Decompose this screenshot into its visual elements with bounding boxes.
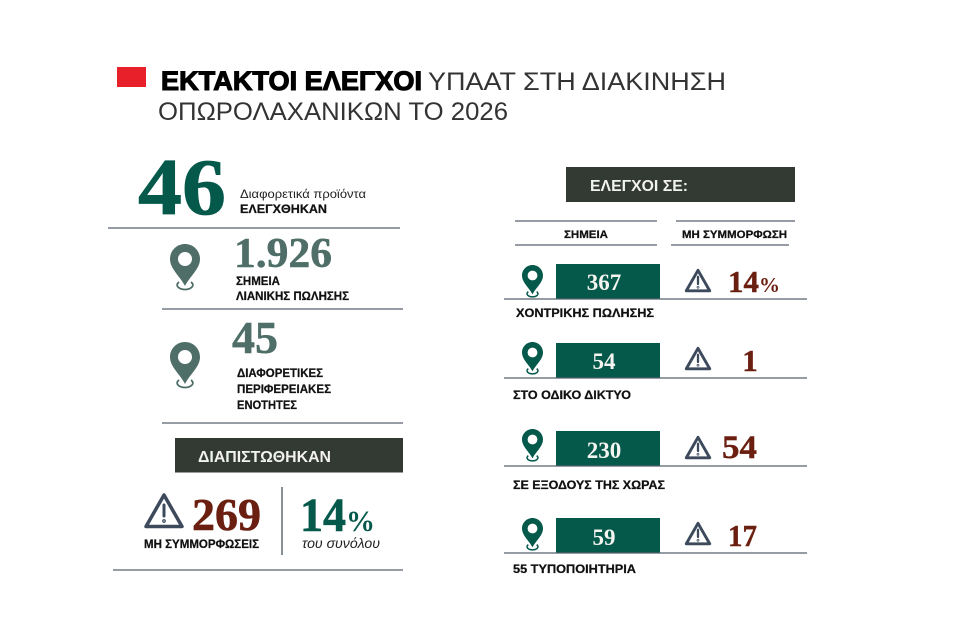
stat: 1.926 retail points: 1.926	[234, 231, 332, 277]
heading: found	[175, 438, 403, 472]
icon: warning triangle	[686, 348, 710, 369]
row: packing plants: 59	[592, 525, 616, 550]
row: country exits: 54	[722, 430, 757, 466]
title line 1	[161, 66, 726, 96]
title line 1: ΥΠΑΑΤ ΣΤΗ ΔΙΑΚΙΝΗΣΗ	[428, 68, 726, 96]
stat: 45 regional units	[170, 313, 331, 412]
row: wholesale: 367	[587, 270, 621, 295]
row: country exits	[504, 429, 807, 492]
stat: 46 products	[138, 142, 366, 232]
row: country exits: 230	[587, 438, 621, 463]
row: country exits: ΣΕ ΕΞΟΔΟΥΣ ΤΗΣ ΧΩΡΑΣ	[513, 478, 665, 492]
stat: 14 percent of total	[300, 489, 380, 551]
heading: found: ΔΙΑΠΙΣΤΩΘΗΚΑΝ	[198, 449, 331, 466]
row: wholesale: ΧΟΝΤΡΙΚΗΣ ΠΩΛΗΣΗΣ	[516, 306, 654, 320]
icon: warning triangle	[686, 270, 710, 291]
icon: grey location pin	[170, 342, 200, 388]
title line 1: ΕΚΤΑΚΤΟΙ ΕΛΕΓΧΟΙ	[161, 66, 422, 96]
icon: warning triangle	[146, 495, 182, 526]
stat: 45 regional units: 45	[232, 313, 278, 363]
row: packing plants: 55 ΤΥΠΟΠΟΙΗΤΗΡΙΑ	[513, 562, 636, 576]
panel: checks table	[504, 167, 807, 576]
icon: green location pin	[522, 342, 543, 374]
icon: grey location pin	[170, 244, 200, 290]
icon: warning triangle	[686, 437, 710, 458]
stat: 14 percent of total: του συνόλου	[302, 535, 380, 551]
column header: non-compliance	[671, 221, 795, 245]
row: road network: 54	[592, 349, 616, 374]
row: packing plants: 17	[728, 518, 757, 553]
icon: green location pin	[522, 518, 543, 550]
stat: 45 regional units: ΔΙΑΦΟΡΕΤΙΚΕΣ	[237, 366, 323, 380]
stat: 46 products: 46	[138, 142, 226, 232]
stat: 14 percent of total: %	[346, 505, 375, 538]
title	[117, 66, 726, 126]
stat: 45 regional units: ΕΝΟΤΗΤΕΣ	[237, 398, 297, 412]
icon: red square	[117, 67, 146, 87]
stat: 46 products: Διαφορετικά προϊόντα	[240, 187, 366, 201]
stat: 1.926 retail points: ΣΗΜΕΙΑ	[236, 274, 280, 288]
panel: left summary	[108, 142, 403, 570]
stat: 14 percent of total: 14	[300, 489, 346, 542]
row: wholesale: 14	[728, 264, 759, 299]
stat: 45 regional units: ΠΕΡΙΦΕΡΕΙΑΚΕΣ	[237, 382, 331, 396]
column header: points: ΣΗΜΕΙΑ	[564, 229, 608, 241]
stat: 269 non-compliances	[144, 490, 261, 551]
stat: 1.926 retail points	[170, 231, 349, 303]
stat: 46 products: ΕΛΕΓΧΘΗΚΑΝ	[240, 202, 327, 216]
row: road network	[504, 342, 807, 402]
title line 2: ΟΠΩΡΟΛΑΧΑΝΙΚΩΝ ΤΟ 2026	[158, 98, 508, 126]
stat: 269 non-compliances: ΜΗ ΣΥΜΜΟΡΦΩΣΕΙΣ	[144, 537, 259, 551]
column header: non-compliance: ΜΗ ΣΥΜΜΟΡΦΩΣΗ	[682, 229, 787, 241]
heading: checks in: ΕΛΕΓΧΟΙ ΣΕ:	[590, 178, 688, 195]
heading: checks in	[566, 167, 795, 202]
icon: green location pin	[522, 429, 543, 461]
icon: green location pin	[522, 265, 543, 297]
stat: 269 non-compliances: 269	[192, 490, 261, 540]
icon: warning triangle	[686, 523, 710, 544]
row: wholesale: %	[759, 273, 780, 297]
row: road network: 1	[742, 343, 758, 378]
row: packing plants	[504, 518, 807, 576]
row: wholesale	[504, 264, 807, 320]
stat: 1.926 retail points: ΛΙΑΝΙΚΗΣ ΠΩΛΗΣΗΣ	[236, 289, 349, 303]
row: road network: ΣΤΟ ΟΔΙΚΟ ΔΙΚΤΥΟ	[513, 388, 631, 402]
